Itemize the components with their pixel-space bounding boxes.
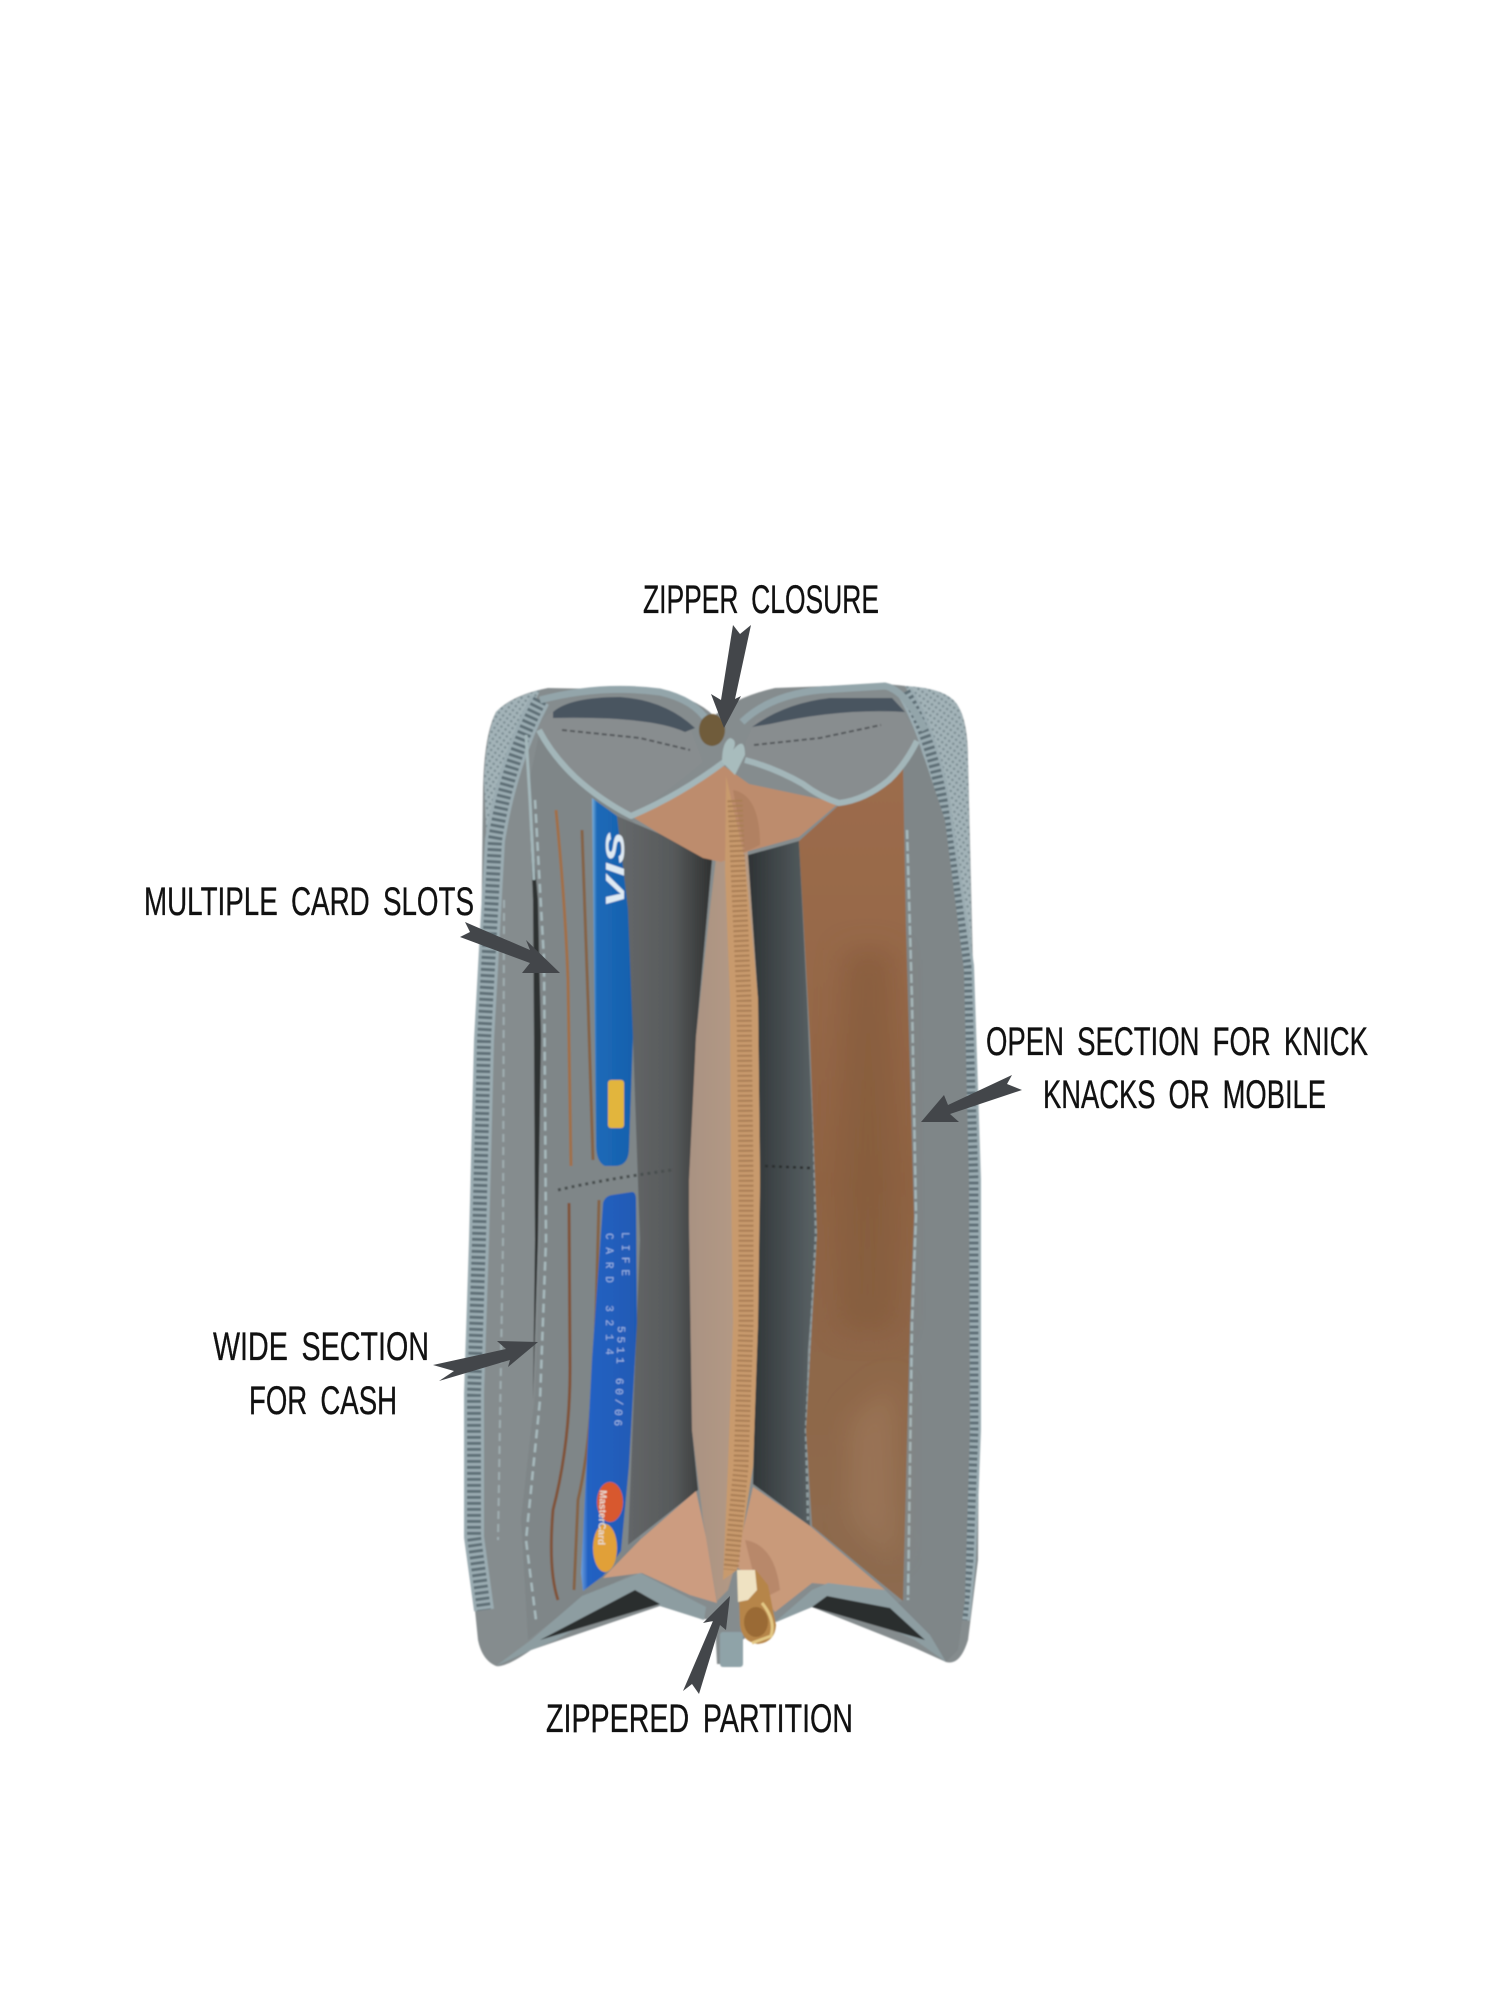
- arrow: open section: [921, 1075, 1022, 1122]
- label: zippered partition: ZIPPERED PARTITION: [546, 1697, 853, 1741]
- lower card: CARD 3214: [602, 1233, 614, 1355]
- left zipper band: [474, 700, 540, 1610]
- peach bottom gusset left: [603, 1491, 717, 1603]
- right zipper band: [905, 692, 973, 1620]
- flap stitches: [562, 725, 881, 750]
- flap edge light: [539, 730, 917, 816]
- label: wide section line 1: WIDE SECTION: [213, 1325, 429, 1369]
- dark right pocket: [748, 841, 817, 1526]
- lower card: [581, 1192, 637, 1591]
- lower card: MasterCard: [595, 1490, 608, 1545]
- lining shading: [840, 950, 895, 1330]
- wallet photo: [469, 684, 979, 1667]
- left gray panel: [521, 730, 640, 1640]
- arrow: multiple card slots: [460, 922, 560, 973]
- label: multiple card slots: MULTIPLE CARD SLOTS: [144, 880, 474, 924]
- top zipper shadow right: [752, 698, 905, 727]
- top zipper shadow left: [553, 697, 695, 732]
- label: wide section line 2: FOR CASH: [249, 1379, 397, 1423]
- zipper pull top: [699, 714, 745, 775]
- seam dark pocket: [765, 1166, 810, 1168]
- stitching right panel: [907, 830, 916, 1600]
- peach shadow: [745, 1540, 780, 1600]
- stitching left panel: [526, 800, 546, 1620]
- center partition flap: [689, 790, 760, 1601]
- bottom rim right: [774, 1583, 946, 1662]
- corner weave top right: [905, 686, 972, 960]
- partition zipper: [723, 776, 760, 1580]
- card slot seam lines: [551, 810, 599, 1600]
- gold zipper pull: [737, 1570, 776, 1644]
- lower card: 5511 60/06: [611, 1326, 626, 1426]
- peach top gusset: [631, 766, 839, 862]
- arrow: wide section: [433, 1341, 538, 1381]
- panel edge light: [526, 735, 534, 880]
- bottom rim left: [496, 1573, 706, 1666]
- dark gap left: [529, 800, 541, 1400]
- card slot seam: [558, 1170, 672, 1190]
- arrow: zippered partition: [683, 1596, 730, 1694]
- peach bottom gusset right: [735, 1487, 885, 1612]
- brown lining: [799, 766, 914, 1601]
- wallet outer body: [469, 684, 979, 1666]
- peach shade: [733, 790, 760, 852]
- top flap right: [746, 703, 917, 803]
- label: zipper closure: ZIPPER CLOSURE: [643, 578, 879, 622]
- corner weave top left: [484, 690, 540, 850]
- upper card: [592, 798, 633, 1166]
- card brand: VIS: [600, 831, 630, 908]
- bottom rim shadow right: [812, 1596, 925, 1640]
- stitching dark pocket: [801, 845, 816, 1520]
- top flap left: [539, 710, 703, 816]
- mastercard logo: [597, 1482, 623, 1522]
- right gray panel: [890, 741, 970, 1662]
- card number: LIFE: [618, 1232, 630, 1276]
- label: open section line 2: KNACKS OR MOBILE: [1043, 1073, 1326, 1117]
- interior left pocket: [617, 816, 712, 1545]
- partition zipper end tab: [720, 1632, 743, 1667]
- top rim: [540, 686, 925, 730]
- arrow: zipper closure: [711, 625, 751, 728]
- bottom rim shadow left: [540, 1590, 660, 1640]
- card chip: [608, 1080, 624, 1128]
